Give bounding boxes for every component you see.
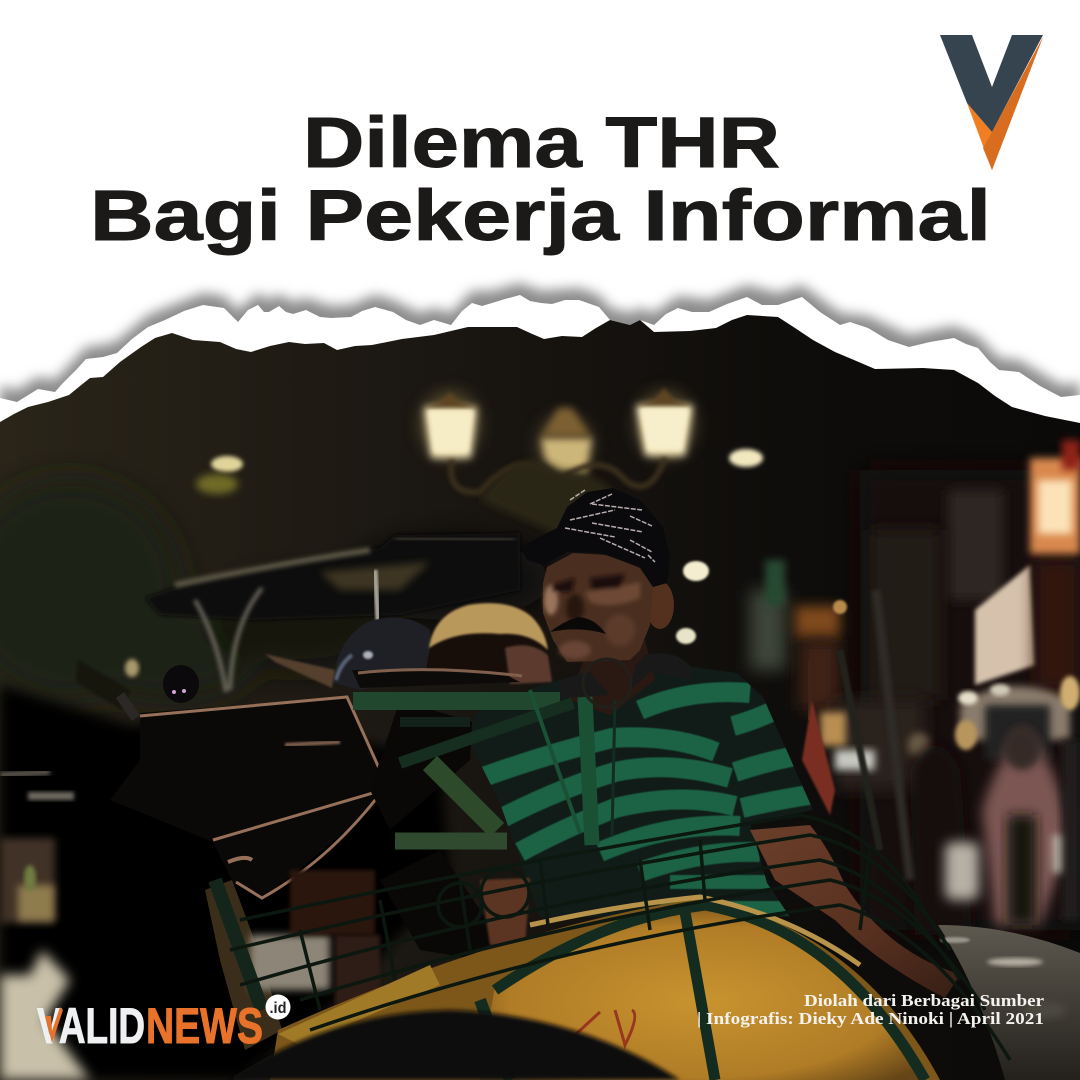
ear: [650, 583, 674, 629]
foreground handlebar and dark frame: [0, 660, 199, 802]
blurred market behind the frame: [0, 838, 55, 923]
title: Bagi Pekerja Informal: [90, 177, 991, 256]
brand logo: VALIDNEWS.id: VALID: [37, 998, 145, 1054]
crowd: blurred pedestrians: [910, 726, 1080, 935]
helmet: [333, 618, 434, 690]
street lamps: [420, 388, 695, 535]
background: night sky: [0, 300, 1080, 1080]
torn paper edge: [0, 283, 1080, 470]
cap: [520, 488, 670, 587]
brand logo: VALIDNEWS.id: [37, 994, 290, 1054]
blurred cream shape bottom left: [0, 950, 90, 1080]
face highlights: [544, 574, 640, 659]
source credit: Diolah dari Berbagai Sumber: [804, 991, 1045, 1010]
trishaw driver: [467, 488, 815, 917]
title: Dilema THR: [303, 104, 780, 183]
bokeh lights: [125, 449, 847, 677]
grey metal body at right: [938, 925, 1080, 1080]
folded black hood with piping: [110, 654, 522, 900]
neck: [570, 640, 655, 715]
background: blurred buildings and market: [750, 440, 1080, 930]
source credit: [697, 991, 1045, 1028]
canopy behind the rider: [145, 533, 520, 692]
arm: [750, 825, 960, 998]
foreground darkness at lower left: [0, 685, 450, 1080]
source credit: | Infografis: Dieky Ade Ninoki | April 2021: [697, 1009, 1044, 1028]
brand logo: VALIDNEWS.id: .id: [270, 1000, 286, 1017]
lower body compartment behind the wire cage: [205, 850, 530, 1050]
mustard seat back: [270, 897, 940, 1080]
shirt: [467, 655, 815, 917]
face: [543, 553, 653, 662]
cap print: [565, 490, 655, 562]
photo: trishaw driver at night: [0, 300, 1080, 1080]
brand logo: VALIDNEWS.id: NEWS: [146, 998, 263, 1054]
wire basket: [230, 590, 1010, 1060]
moustache: [550, 617, 606, 634]
title: [90, 104, 991, 256]
collar: [560, 653, 692, 698]
passenger head with blond hair: [426, 603, 552, 684]
flag: [802, 700, 835, 815]
front wheel: [228, 1010, 680, 1080]
green trishaw frame bars: [215, 659, 631, 1010]
background: blurred foliage: [0, 480, 550, 700]
logo: Validnews V mark: [940, 35, 1043, 170]
